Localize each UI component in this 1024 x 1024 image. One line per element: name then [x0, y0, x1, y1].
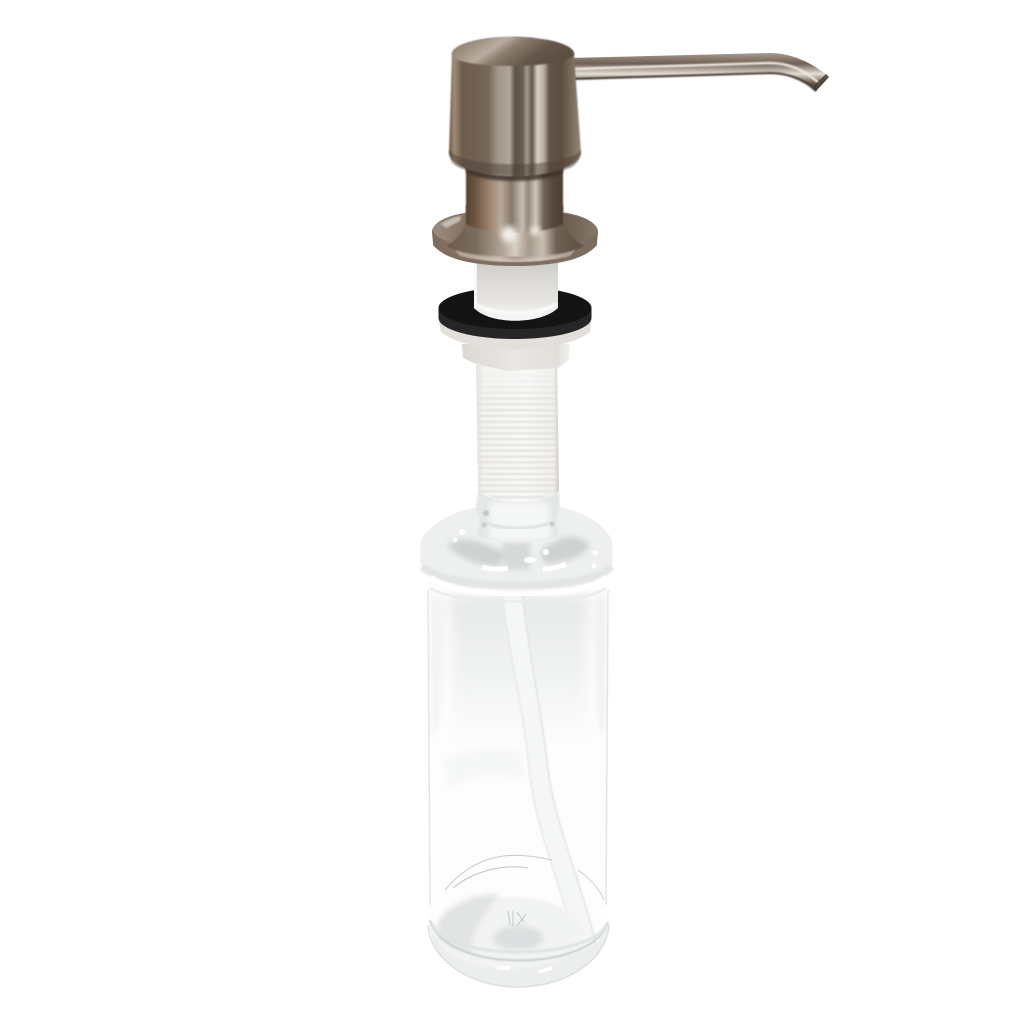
black washer — [438, 287, 592, 339]
threaded white shank — [439, 322, 591, 502]
bottle side edges — [428, 590, 608, 905]
bottle — [420, 490, 613, 987]
bottle base — [428, 855, 609, 987]
dip tube — [502, 590, 597, 957]
head shadow on neck — [466, 165, 563, 181]
product image: soap dispenser — [420, 36, 829, 988]
flange — [432, 205, 598, 266]
flange highlights — [501, 226, 540, 242]
thread tube — [476, 365, 559, 502]
upper white thread — [474, 258, 558, 321]
metal pump — [432, 37, 829, 266]
shoulder rim and highlights — [423, 529, 611, 602]
head top — [452, 37, 574, 66]
neck — [466, 165, 563, 233]
base emblem — [508, 910, 526, 926]
white disc — [439, 322, 591, 349]
head bottom bevel — [449, 150, 581, 175]
spout — [568, 53, 829, 91]
thread ribs — [479, 386, 558, 498]
hex nut — [462, 344, 570, 371]
bottle neck — [476, 490, 560, 542]
bottle shoulder — [420, 507, 613, 588]
bottle body — [428, 575, 609, 987]
head body — [449, 37, 581, 176]
